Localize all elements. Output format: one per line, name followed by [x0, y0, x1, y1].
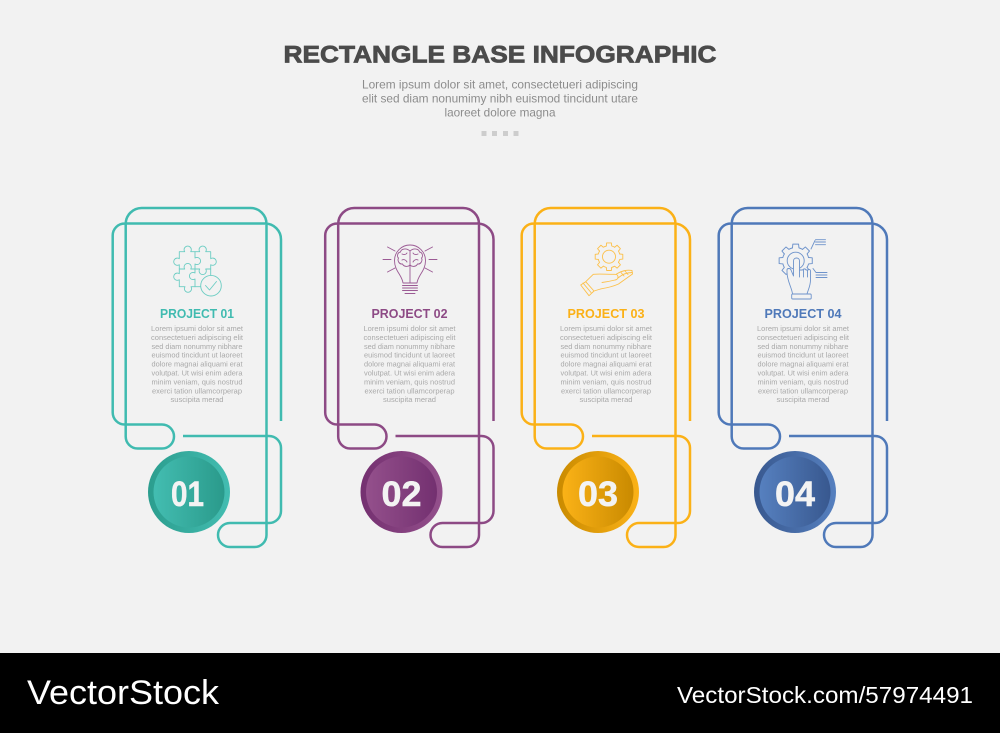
body text 02: Lorem ipsumi dolor sit amet: [364, 324, 456, 333]
body text 01: Lorem ipsumi dolor sit amet: [151, 324, 244, 333]
body text 02: exerci tation ullamcorperap: [364, 386, 454, 395]
body text 02: suscipita merad: [383, 395, 436, 404]
subtitle text: [362, 78, 638, 120]
body text 03: minim veniam, quis nostrud: [560, 377, 652, 386]
panel: project 03: [522, 208, 690, 547]
body text 03: Lorem ipsumi dolor sit amet: [560, 324, 653, 333]
icon: hand pressing gear: [779, 240, 827, 299]
subtitle text: Lorem ipsum dolor sit amet, consectetueri adipiscing: [362, 78, 638, 92]
panel: project 04: [719, 208, 887, 547]
body text 04: exerci tation ullamcorperap: [758, 386, 848, 395]
number badge 03: [557, 451, 639, 533]
number badge 01: [148, 451, 230, 533]
body text 03: volutpat. Ut wisi enim adera: [560, 368, 652, 378]
heading: project 04: PROJECT 04: [764, 307, 842, 321]
watermark url: VectorStock.com/57974491: [677, 682, 973, 708]
panel: project 02: [325, 208, 494, 547]
body text 02: sed diam nonummy nibhare: [364, 342, 455, 351]
body text 04: euismod tincidunt ut laoreet: [758, 351, 849, 360]
body text 04: sed diam nonummy nibhare: [758, 342, 848, 351]
subtitle text: elit sed diam nonumimy nibh euismod tincidunt utare: [362, 92, 638, 106]
body text 03: sed diam nonummy nibhare: [560, 342, 652, 351]
body text 01: euismod tincidunt ut laoreet: [152, 351, 243, 360]
number badge 04: 04: [775, 475, 816, 514]
number badge 02: [360, 451, 442, 533]
body text 02: [364, 324, 456, 404]
body text 04: suscipita merad: [776, 395, 830, 404]
body text 01: consectetueri adipiscing elit: [151, 333, 244, 342]
body text 04: dolore magnai aliquami erat: [758, 360, 849, 369]
body text 01: suscipita merad: [170, 395, 224, 404]
icon: puzzle with check: [174, 246, 221, 296]
heading: project 01: PROJECT 01: [160, 307, 234, 321]
number badge 02: 02: [382, 475, 422, 514]
body text 03: exerci tation ullamcorperap: [561, 386, 651, 395]
body text 02: volutpat. Ut wisi enim adera: [364, 368, 456, 378]
panel: project 01: [113, 208, 281, 547]
body text 03: consectetueri adipiscing elit: [560, 333, 653, 342]
body text 04: consectetueri adipiscing elit: [757, 333, 850, 342]
watermark footer bar: [0, 653, 1000, 733]
frame outline 02: [325, 208, 494, 547]
body text 01: [151, 324, 244, 404]
body text 04: volutpat. Ut wisi enim adera: [758, 368, 849, 378]
frame outline 04: [719, 208, 887, 547]
frame outline 01: [113, 208, 281, 547]
body text 03: [560, 324, 653, 404]
subtitle text: laoreet dolore magna: [444, 106, 556, 120]
number badge 04: [754, 451, 836, 533]
icon: gear on open hand: [581, 243, 632, 296]
body text 04: [757, 324, 850, 404]
body text 03: suscipita merad: [580, 395, 632, 404]
body text 04: Lorem ipsumi dolor sit amet: [757, 324, 850, 333]
watermark logo: VectorStock: [27, 674, 220, 712]
number badge 03: 03: [578, 475, 618, 514]
body text 03: euismod tincidunt ut laoreet: [560, 351, 652, 360]
heading: project 03: PROJECT 03: [568, 307, 645, 321]
body text 02: consectetueri adipiscing elit: [364, 333, 456, 342]
body text 02: dolore magnai aliquami erat: [364, 360, 456, 369]
body text 01: minim veniam, quis nostrud: [152, 377, 242, 386]
header dots: [482, 131, 518, 136]
body text 02: euismod tincidunt ut laoreet: [364, 351, 456, 360]
title: RECTANGLE BASE INFOGRAPHIC: [284, 41, 717, 68]
body text 01: volutpat. Ut wisi enim adera: [152, 368, 243, 378]
frame outline 03: [522, 208, 690, 547]
body text 03: dolore magnai aliquami erat: [560, 360, 652, 369]
heading: project 02: PROJECT 02: [372, 307, 448, 321]
body text 01: sed diam nonummy nibhare: [152, 342, 242, 351]
body text 01: dolore magnai aliquami erat: [152, 360, 243, 369]
body text 02: minim veniam, quis nostrud: [364, 377, 455, 386]
body text 01: exerci tation ullamcorperap: [152, 386, 242, 395]
body text 04: minim veniam, quis nostrud: [758, 377, 848, 386]
number badge 01: 01: [171, 475, 204, 514]
icon: light bulb with brain: [383, 245, 437, 294]
